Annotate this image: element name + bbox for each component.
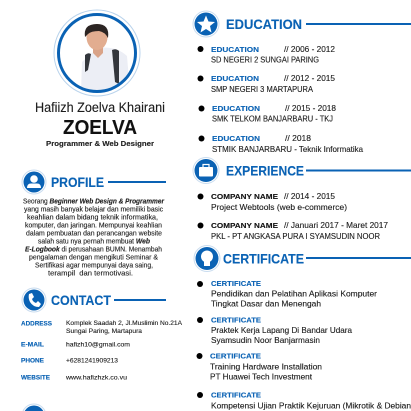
education item 3: SMK TELKOM BANJARBARU - TKJ — [212, 114, 333, 124]
email: E-MAIL — [21, 342, 44, 348]
experience item 2: COMPANY NAME — [211, 221, 278, 230]
icon: person — [22, 170, 46, 194]
heading: experience: EXPERIENCE — [226, 162, 304, 178]
job title: Programmer & Web Designer — [46, 139, 154, 148]
education item 1: SD NEGERI 2 SUNGAI PARING — [211, 56, 319, 64]
phone: PHONE — [21, 358, 44, 364]
education item 1: // 2006 - 2012 — [284, 45, 335, 54]
education item 1 — [198, 45, 335, 64]
experience item 1: // 2014 - 2015 — [284, 192, 336, 201]
certificate item 4: Kompetensi Ujian Praktik Kejuruan (Mikrotik & Debian — [211, 402, 411, 410]
profile text: terampil dan termotivasi. — [48, 268, 133, 278]
certificate item 2 — [197, 316, 353, 345]
experience item 1 — [198, 192, 347, 212]
profile text: keahlian dalam bidang teknik informatika, — [27, 212, 158, 222]
profile text: dalam pembuatan dan perancangan website — [26, 228, 162, 238]
certificate item 1: Tingkat Dasar dan Menengah — [211, 300, 321, 308]
panel: skills — [22, 404, 97, 411]
education item 3 — [198, 104, 336, 124]
experience item 1: COMPANY NAME — [211, 192, 278, 201]
education item 3: EDUCATION — [212, 104, 260, 113]
heading: certificate: CERTIFICATE — [223, 250, 304, 266]
icon: light bulb — [194, 246, 220, 272]
profile text: komputer, dan jaringan. Mempunyai keahlian — [25, 220, 162, 230]
certificate item 2: CERTIFICATE — [211, 316, 261, 324]
email: hafizh10@gmail.com — [66, 342, 131, 348]
experience item 2 — [198, 221, 388, 241]
profile text: Sertifikasi agar mempunyai daya saing, — [35, 260, 153, 270]
certificate item 3: Training Hardware Installation — [210, 362, 322, 372]
education item 1: EDUCATION — [211, 45, 259, 54]
profile text: Seorang Beginner Web Design & Programmer — [23, 196, 165, 206]
icon: star — [193, 11, 219, 37]
certificate item 2: Praktek Kerja Lapang Di Bandar Udara — [211, 326, 353, 335]
certificate item 3 — [196, 352, 322, 382]
website — [21, 374, 127, 382]
education item 2 — [198, 74, 336, 94]
certificate item 1: Pendidikan dan Pelatihan Aplikasi Komputer — [211, 290, 377, 298]
education item 4: STMIK BANJARBARU - Teknik Informatika — [212, 145, 364, 154]
panel: certificate — [194, 246, 411, 410]
phone: +6281241909213 — [66, 358, 118, 364]
certificate item 4: CERTIFICATE — [211, 390, 261, 400]
panel: experience — [193, 158, 411, 241]
icon: briefcase — [193, 158, 219, 184]
certificate item 2: Syamsudin Noor Banjarmasin — [211, 336, 320, 345]
certificate item 3: CERTIFICATE — [210, 352, 261, 360]
profile text: E-Logbook di perusahaan BUMN. Menambah — [25, 244, 162, 254]
certificate item 4 — [197, 390, 411, 410]
panel: profile — [22, 170, 166, 278]
email — [21, 342, 131, 348]
address: ADDRESS — [21, 322, 52, 328]
icon: skills — [22, 404, 46, 411]
address — [21, 320, 183, 335]
education item 2: SMP NEGERI 3 MARTAPURA — [211, 85, 314, 94]
profile text — [23, 196, 165, 278]
experience item 2: // Januari 2017 - Maret 2017 — [284, 221, 388, 230]
website: www.hafizhzk.co.vu — [65, 374, 127, 382]
heading: contact: CONTACT — [51, 293, 112, 308]
address: Komplek Saadah 2, Jl.Muslimin No.21A — [66, 320, 183, 327]
icon: phone — [22, 288, 46, 312]
heading: education: EDUCATION — [226, 16, 302, 32]
education item 3: // 2015 - 2018 — [285, 104, 336, 113]
name: Hafiizh Zoelva Khairani — [35, 100, 165, 115]
education item 4: // 2018 — [285, 134, 311, 143]
phone — [21, 358, 118, 364]
panel: contact — [21, 288, 183, 382]
panel: education — [193, 11, 411, 154]
experience item 1: Project Webtools (web e-commerce) — [211, 203, 347, 212]
education item 4: EDUCATION — [212, 134, 260, 143]
profile text: yang masih banyak belajar dan memiliki basic — [24, 204, 163, 214]
profile text: pengalaman dengan mengikuti Seminar & — [29, 252, 158, 262]
website: WEBSITE — [21, 376, 50, 382]
heading: profile: PROFILE — [51, 175, 104, 190]
education item 2: // 2012 - 2015 — [284, 74, 336, 83]
address: Sungai Paring, Martapura — [66, 328, 142, 335]
experience item 2: PKL - PT ANGKASA PURA I SYAMSUDIN NOOR — [211, 232, 380, 241]
certificate item 1: CERTIFICATE — [211, 279, 261, 288]
profile photo — [54, 10, 140, 96]
profile text: salah satu nya pernah membuat Web — [38, 236, 151, 246]
certificate item 1 — [197, 279, 377, 308]
education item 4 — [198, 134, 364, 154]
education item 2: EDUCATION — [211, 74, 259, 83]
certificate item 3: PT Huawei Tech Investment — [210, 372, 313, 382]
nickname: ZOELVA — [63, 117, 137, 139]
